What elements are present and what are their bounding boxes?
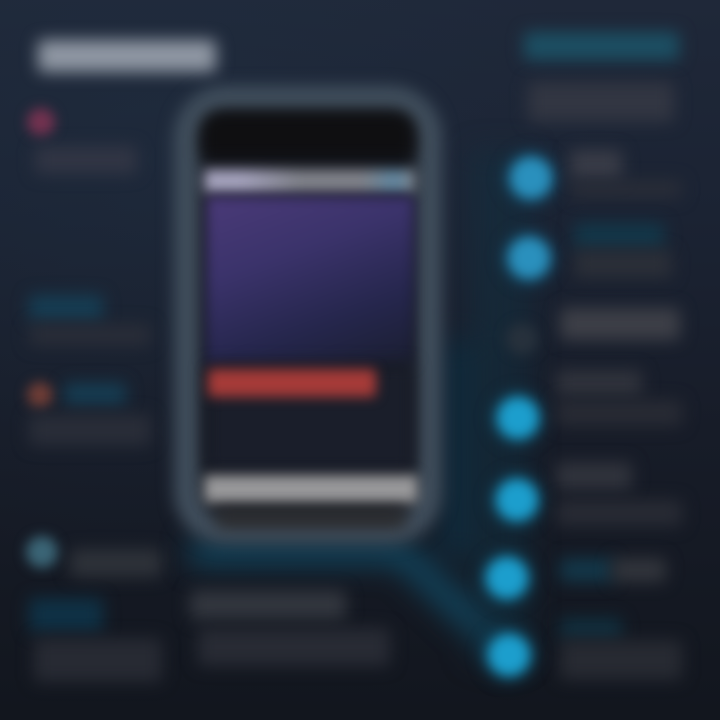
heading: left section two [64,383,126,405]
item 7 label [560,618,622,640]
text block: left section two [29,414,151,446]
item 5 label [556,462,632,490]
item 6 label right [612,558,666,582]
icon: teal dot [26,536,58,568]
icon: blue dot 2 [508,237,550,279]
item 4 text [556,400,682,426]
icon: blue dot 6 [486,557,528,599]
item 5 text [556,500,682,526]
phone bottom dock [216,510,406,528]
text block: bottom centre [186,586,392,668]
bottom centre heading [190,590,346,620]
icon: dim dot 3 [506,323,538,355]
item 6 label [560,558,614,582]
title [38,40,216,72]
phone top bar [202,112,414,158]
text block: left intro [35,146,137,174]
item 1 label [570,150,622,180]
icon: blue dot 1 [510,157,552,199]
grey bar [204,475,418,503]
item 4 label [556,370,642,396]
icon: red dot [27,108,55,136]
heading: right [524,32,679,60]
bottom centre body [198,628,390,666]
phone screen gradient [206,196,414,366]
text block: left section one [29,324,151,346]
item 1 text [570,180,682,198]
text block: left section four [34,638,162,682]
phone frame [174,86,442,544]
phone status strip [204,169,416,193]
item 3 label [560,308,680,340]
heading: left section four [29,598,103,632]
item 2 text [574,250,672,278]
panel: right column [474,26,686,688]
panel: left column [20,102,165,684]
icon: blue dot 5 [496,479,538,521]
text block: right intro [528,82,674,122]
item 7 text [560,640,682,680]
phone [166,80,450,551]
item 2 label [574,223,664,249]
icon: blue dot 7 [488,634,530,676]
phone lower screen [206,364,414,472]
text block: left section three label [70,549,162,577]
icon: blue dot 4 [497,397,539,439]
icon: orange dot [27,382,53,408]
heading: left section one [29,295,103,321]
red button bar [208,369,376,397]
